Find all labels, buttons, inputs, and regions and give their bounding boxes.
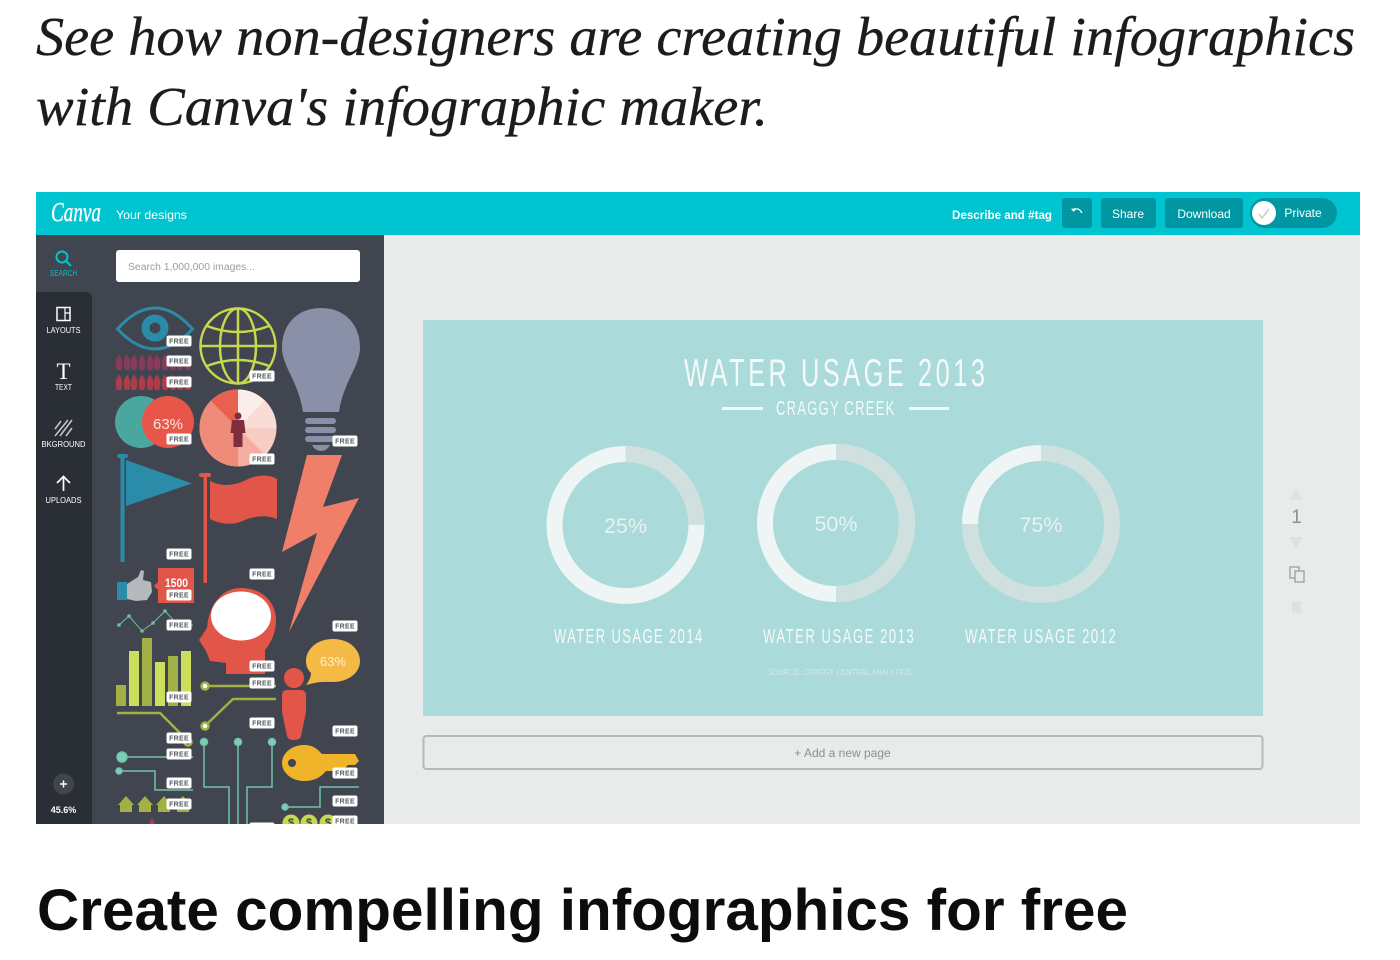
logo: Canva: Canva xyxy=(51,197,101,227)
free badges: FREE xyxy=(169,736,189,742)
icon: line chart xyxy=(117,609,193,633)
free badges: FREE xyxy=(252,720,272,728)
icon: speech bubble 63% xyxy=(306,639,360,685)
icon: head with speech oval xyxy=(199,588,276,674)
page controls: 1 xyxy=(1291,507,1302,528)
icon: dollar coins: $ xyxy=(288,817,294,829)
intro heading: See how non-designers are creating beautiful infographics xyxy=(36,6,1355,67)
private toggle xyxy=(1250,198,1337,228)
canvas area xyxy=(384,235,1360,824)
free badges: FREE xyxy=(252,572,272,578)
connector lines: olive xyxy=(117,682,276,746)
undo button xyxy=(1062,198,1092,228)
icon: small red marker xyxy=(149,818,155,824)
icon: venn 63%: 63% xyxy=(153,416,183,433)
icon: lightning xyxy=(282,455,359,632)
free badges: FREE xyxy=(252,374,272,380)
free badges: FREE xyxy=(252,664,272,670)
background tool: BKGROUND xyxy=(42,440,86,449)
source note: SOURCE: CRAGGY CENTRAL ANALYTICS xyxy=(768,668,911,677)
intro heading: with Canva's infographic maker. xyxy=(36,76,768,137)
layouts tool: LAYOUTS xyxy=(46,326,80,335)
free badges: FREE xyxy=(169,802,189,808)
icon: light bulb xyxy=(282,308,360,451)
text tool: TEXT xyxy=(55,383,72,392)
free badges: FREE xyxy=(169,380,189,386)
free badges: FREE xyxy=(252,456,272,464)
icon: key xyxy=(282,745,359,781)
icon: eye xyxy=(118,308,192,349)
icon: dollar coins: $ xyxy=(306,817,312,829)
search tool xyxy=(50,252,77,278)
design subtitle xyxy=(722,397,949,420)
donut: 25% xyxy=(554,454,696,596)
icon: bar chart xyxy=(116,638,191,706)
add page button: + Add a new page xyxy=(794,746,891,760)
donut: 75% xyxy=(970,453,1112,595)
icon: blue pennant xyxy=(117,454,192,562)
icon: pie with person xyxy=(200,390,276,466)
uploads tool xyxy=(46,476,82,505)
layouts tool xyxy=(46,308,80,335)
icon: dollar coins xyxy=(282,814,333,824)
share button xyxy=(1101,198,1156,228)
connector lines: teal xyxy=(116,738,359,824)
donut labels: WATER USAGE 2012 xyxy=(965,625,1116,648)
icon: red flag xyxy=(199,473,277,583)
free badges: FREE xyxy=(335,798,355,806)
donut: 50%: 50% xyxy=(814,512,858,536)
editor screenshot xyxy=(36,192,1360,834)
free badges: FREE xyxy=(335,818,355,826)
free badges: FREE xyxy=(169,694,189,702)
free badges: FREE xyxy=(335,728,355,736)
free badges: FREE xyxy=(169,780,189,788)
free badges: FREE xyxy=(169,436,189,444)
left sidebar xyxy=(36,235,384,834)
free badges xyxy=(166,336,358,834)
donut labels xyxy=(554,625,1116,648)
icon: dollar coins: $ xyxy=(325,817,331,829)
free badges: FREE xyxy=(252,680,272,688)
uploads tool: UPLOADS xyxy=(46,496,82,505)
icon: people rows xyxy=(116,355,191,390)
free badges: FREE xyxy=(169,752,189,758)
text tool: T xyxy=(56,359,71,384)
free badges: FREE xyxy=(169,552,189,558)
free badges: FREE xyxy=(169,592,189,600)
design subtitle: CRAGGY CREEK xyxy=(776,397,895,420)
icon: red person xyxy=(282,668,306,740)
donut labels: WATER USAGE 2014 xyxy=(554,625,702,648)
add page button xyxy=(424,736,1262,769)
intro heading xyxy=(36,6,1355,137)
icon: speech bubble 63%: 63% xyxy=(320,654,346,669)
tool rail xyxy=(36,252,92,824)
icon: 1500 count xyxy=(154,568,194,603)
free badges: FREE xyxy=(335,770,355,778)
share button: Share xyxy=(1112,207,1144,221)
free badges: FREE xyxy=(169,338,189,346)
nav link: Your designs xyxy=(116,208,187,222)
icon: 1500 count: 1500 xyxy=(165,578,188,590)
free badges: FREE xyxy=(169,358,189,366)
download button: Download xyxy=(1177,207,1231,221)
search field: Search 1,000,000 images... xyxy=(128,261,255,273)
download button xyxy=(1165,198,1243,228)
design title: WATER USAGE 2013 xyxy=(684,350,985,394)
tag prompt: Describe and #tag xyxy=(952,208,1052,222)
search field xyxy=(116,250,360,282)
donut: 25%: 25% xyxy=(604,514,647,538)
top bar xyxy=(36,192,1360,235)
private toggle: Private xyxy=(1284,206,1322,220)
icon: venn 63% xyxy=(115,396,194,448)
free badges: FREE xyxy=(335,624,355,630)
icon: houses xyxy=(118,796,191,812)
donut labels: WATER USAGE 2013 xyxy=(763,625,914,648)
icon: thumbs up xyxy=(117,570,152,601)
free badges: FREE xyxy=(169,622,189,630)
design page: water usage xyxy=(423,320,1263,716)
donut: 75%: 75% xyxy=(1019,513,1063,537)
search tool: SEARCH xyxy=(50,269,77,278)
page controls xyxy=(1289,489,1304,613)
icon: globe xyxy=(200,308,276,384)
closing heading: Create compelling infographics for free xyxy=(37,878,1128,943)
free badges: FREE xyxy=(335,438,355,446)
background tool xyxy=(42,420,86,449)
text tool xyxy=(55,364,72,390)
zoom control: 45.6% xyxy=(51,805,76,815)
donut: 50% xyxy=(765,452,907,594)
zoom control xyxy=(51,774,76,815)
